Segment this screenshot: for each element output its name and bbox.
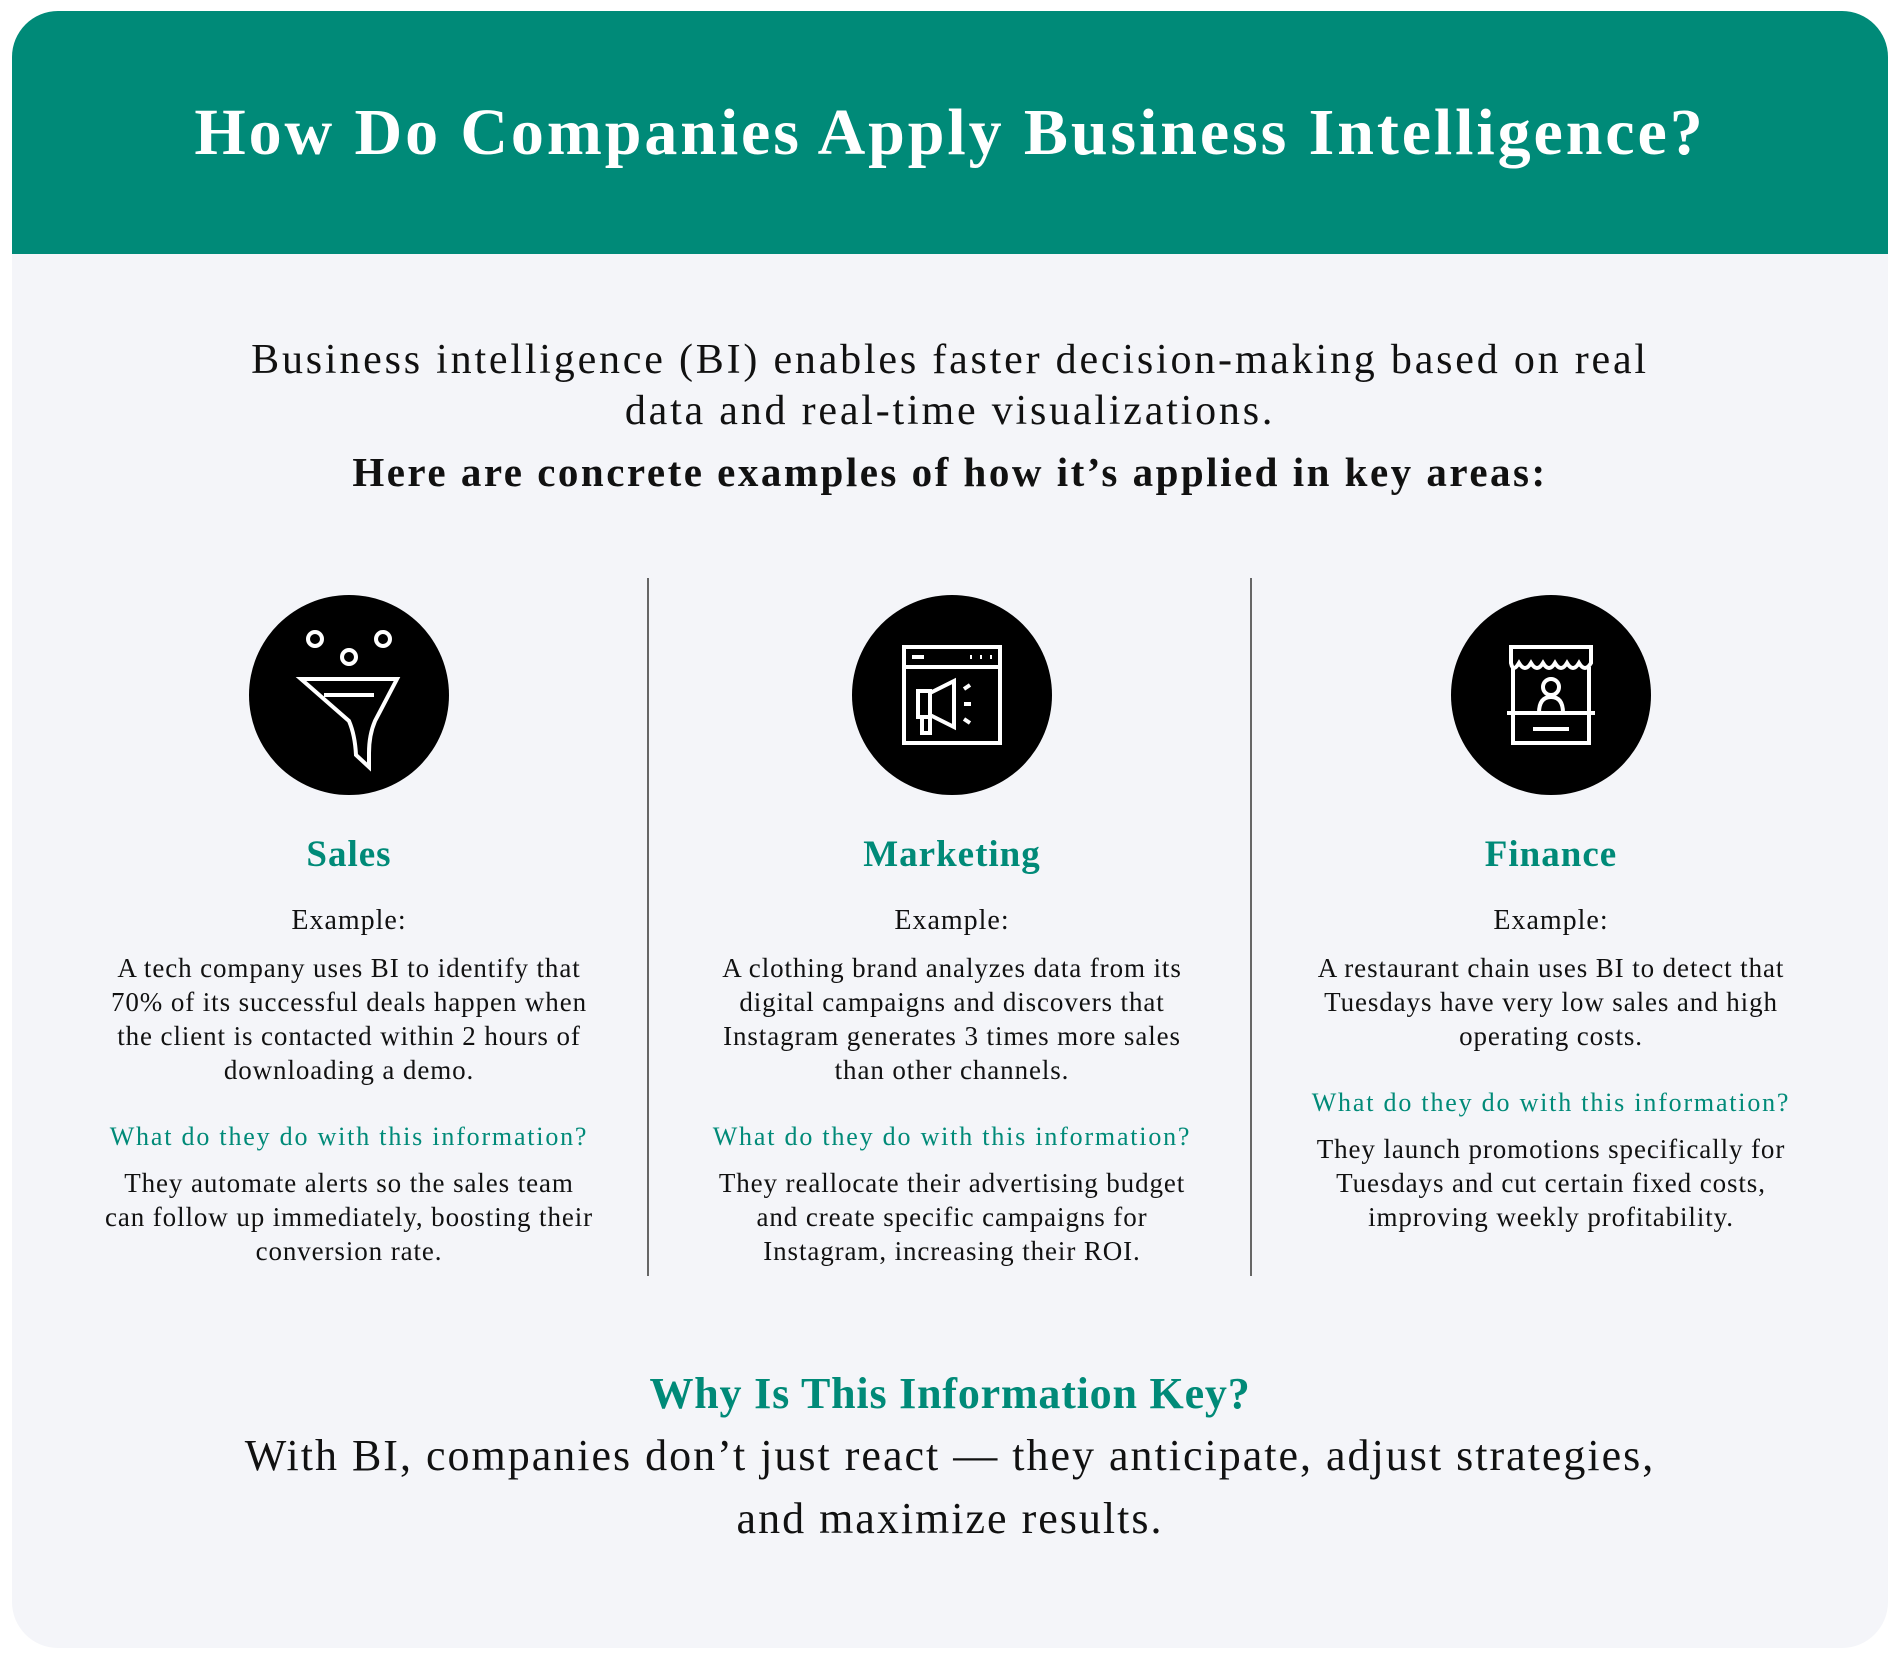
answer: improving weekly profitability. — [1368, 1202, 1734, 1232]
icon: kiosk — [1451, 595, 1651, 795]
example text: the client is contacted within 2 hours of — [117, 1021, 581, 1051]
answer: conversion rate. — [256, 1236, 442, 1266]
example label: Example: — [291, 905, 407, 936]
answer — [1317, 1134, 1785, 1232]
example text: operating costs. — [1459, 1021, 1643, 1051]
heading: sales: Sales — [306, 834, 392, 875]
answer: can follow up immediately, boosting their — [105, 1202, 593, 1232]
column: finance — [1312, 595, 1790, 1232]
heading: finance: Finance — [1485, 834, 1617, 875]
conclusion text: and maximize results. — [737, 1494, 1163, 1543]
answer — [719, 1168, 1185, 1266]
icon: funnel — [249, 595, 449, 795]
icon: megaphone browser — [852, 595, 1052, 795]
intro text: data and real-time visualizations. — [625, 388, 1275, 434]
column: sales — [105, 595, 593, 1266]
question: What do they do with this information? — [1312, 1088, 1790, 1117]
example label: Example: — [1493, 905, 1609, 936]
answer: Tuesdays and cut certain fixed costs, — [1336, 1168, 1766, 1198]
example text — [111, 953, 587, 1085]
example text — [1318, 953, 1784, 1051]
example text: A restaurant chain uses BI to detect that — [1318, 953, 1784, 983]
intro bold line: Here are concrete examples of how it’s applied in key areas: — [352, 449, 1548, 495]
intro text — [251, 337, 1649, 434]
intro text: Business intelligence (BI) enables faster decision-making based on real — [251, 337, 1649, 383]
why heading: Why Is This Information Key? — [649, 1369, 1251, 1418]
example text: A tech company uses BI to identify that — [117, 953, 581, 983]
example label: Example: — [894, 905, 1010, 936]
answer: They automate alerts so the sales team — [124, 1168, 574, 1198]
example text: A clothing brand analyzes data from its — [722, 953, 1182, 983]
example text — [722, 953, 1182, 1085]
conclusion text: With BI, companies don’t just react — they anticipate, adjust strategies, — [245, 1431, 1655, 1480]
answer: and create specific campaigns for — [756, 1202, 1148, 1232]
example text: digital campaigns and discovers that — [739, 987, 1165, 1017]
example text: 70% of its successful deals happen when — [111, 987, 587, 1017]
example text: Instagram generates 3 times more sales — [723, 1021, 1181, 1051]
example text: downloading a demo. — [224, 1055, 474, 1085]
heading: marketing: Marketing — [863, 834, 1041, 875]
conclusion text — [244, 1431, 1655, 1543]
column: marketing — [712, 595, 1191, 1266]
example text: than other channels. — [835, 1055, 1069, 1085]
header bar — [12, 11, 1888, 254]
answer: They launch promotions specifically for — [1317, 1134, 1785, 1164]
question: What do they do with this information? — [110, 1122, 588, 1151]
question: What do they do with this information? — [713, 1122, 1191, 1151]
answer: Instagram, increasing their ROI. — [763, 1236, 1141, 1266]
title: How Do Companies Apply Business Intelligence? — [194, 96, 1706, 169]
answer — [105, 1168, 593, 1266]
example text: Tuesdays have very low sales and high — [1324, 987, 1778, 1017]
answer: They reallocate their advertising budget — [719, 1168, 1185, 1198]
